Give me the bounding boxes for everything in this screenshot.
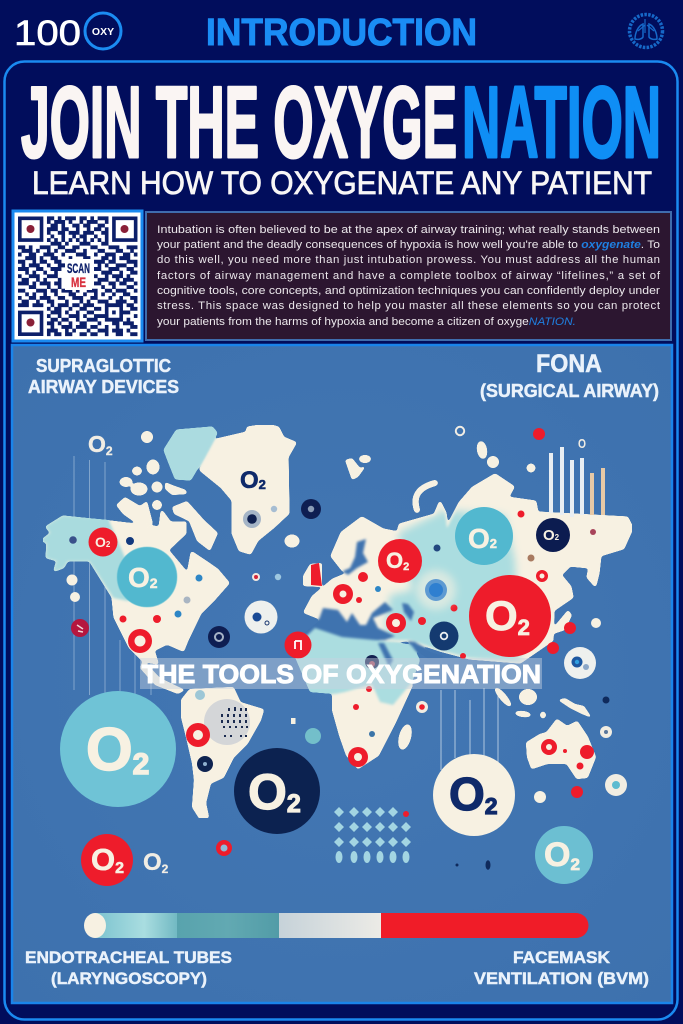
black sea — [402, 603, 414, 621]
south america grey disc — [204, 699, 250, 745]
O2 bubble: teal lower right: 2 — [570, 855, 580, 874]
bar chart: small bars on asia — [551, 436, 603, 517]
label: fona surgical airway: (SURGICAL AIRWAY) — [480, 381, 659, 401]
red marker with glyph — [284, 632, 312, 658]
O2 bubble: large navy: O — [248, 764, 287, 820]
O2 bubble: large cream: O — [449, 768, 485, 820]
O2 bubble: teal north america: O — [128, 562, 150, 593]
icon: lungs badge — [630, 14, 662, 48]
canadian arctic islands — [116, 431, 218, 551]
subtitle: LEARN HOW TO OXYGENATE ANY PATIENT — [32, 165, 652, 201]
gradient spectrum bar — [84, 913, 588, 938]
arctic teal island — [165, 428, 216, 479]
red markers — [120, 428, 594, 817]
map: small markers — [66, 427, 627, 870]
eurasia teal interior — [385, 510, 520, 662]
panel: introduction text: Intubation is often believed to be at the apex of airway training; what really stands between — [157, 224, 660, 236]
O2 bubble: large cream: 2 — [485, 793, 498, 819]
mediterranean sea — [295, 602, 395, 640]
O2 bubble: large red asia: 2 — [518, 615, 530, 640]
alaska teal overlay — [43, 517, 128, 600]
bar chart: small bars on asia: O — [578, 436, 586, 451]
north america — [43, 512, 228, 663]
map: land masses — [43, 425, 632, 818]
map title banner: THE TOOLS OF OXYGENATION — [142, 659, 541, 689]
QR modules — [18, 218, 137, 334]
O2 bubble: red europe: O — [386, 548, 403, 573]
O2 bubble: large navy — [234, 748, 320, 834]
greenland — [201, 425, 295, 553]
panel: QR code — [13, 211, 142, 341]
label: endotracheal tubes: ENDOTRACHEAL TUBES — [25, 948, 232, 967]
header: 100 OXY logo: OXY — [92, 26, 114, 38]
label: supraglottic airway devices: AIRWAY DEVICES — [28, 377, 179, 397]
O2 label: greenland: 2 — [259, 477, 266, 492]
africa — [333, 665, 412, 768]
O2 bubble: small navy asia — [536, 518, 570, 552]
O2 label: top left: O — [88, 431, 106, 457]
O2 bubble: red europe: 2 — [403, 561, 409, 573]
panel: introduction text: factors of airway management and have a complete toolbox of airway “lifelines,” a set of — [157, 270, 661, 282]
O2 bubble: teal north america: 2 — [150, 575, 158, 591]
south america data dots — [221, 707, 248, 737]
O2 bubble: teal asia — [455, 507, 513, 565]
O2 bubble: teal asia: 2 — [490, 536, 497, 551]
O2 bubble: large red asia — [469, 575, 551, 657]
panel: introduction text: stress. This space was designed to help you master all these elements so you can protect — [157, 300, 661, 312]
O2 label: top left: 2 — [106, 444, 113, 458]
south america — [182, 688, 263, 818]
panel: introduction text: do this well, you need more than just intubation prowess. You must address all the human — [157, 254, 660, 266]
O2 bubble: large cream — [433, 754, 515, 836]
panel: tools of oxygenation map — [12, 345, 672, 1003]
panel: introduction text: cognitive tools, core concepts, and optimization techniques you can confidently deploy under — [157, 285, 660, 297]
QR finder dots — [26, 225, 128, 326]
eurasia — [305, 475, 632, 662]
O2 bubble: red europe — [378, 539, 422, 583]
madagascar — [396, 723, 414, 751]
label: facemask ventilation: FACEMASK — [513, 948, 611, 967]
central america — [140, 660, 185, 694]
O2 bubble: large teal: 2 — [133, 748, 149, 781]
label: supraglottic airway devices: SUPRAGLOTTIC — [36, 356, 171, 376]
blue and grey dots — [174, 574, 381, 737]
label: facemask ventilation: VENTILATION (BVM) — [474, 969, 649, 988]
O2 bubble: teal north america — [117, 547, 177, 607]
label: fona surgical airway — [480, 350, 659, 401]
uk red flag shape — [311, 563, 322, 586]
svalbard and novaya zemlya — [345, 458, 366, 480]
O2 bubble: teal lower right: O — [544, 836, 570, 874]
red sea and persian gulf — [378, 643, 393, 667]
O2 bubble: small red north america: O2 — [95, 534, 111, 550]
O2 bubble: small navy asia: O2 — [543, 527, 560, 544]
maritime southeast asia — [493, 625, 592, 718]
red ring markers — [128, 570, 557, 856]
australia — [527, 720, 595, 778]
decorative lines west — [74, 456, 151, 700]
white markers — [66, 574, 601, 803]
scan me badge: ME — [71, 274, 86, 290]
label: fona surgical airway: FONA — [536, 350, 602, 378]
O2 bubble: red lower left — [81, 834, 133, 886]
O2 label: greenland: O — [240, 467, 259, 494]
label: endotracheal tubes — [25, 948, 232, 988]
panel: introduction text: your patients from the harms of hypoxia and become a citizen of oxyge NATION. — [157, 316, 576, 328]
O2 label: white lower left: O — [143, 849, 162, 876]
O2 label: white lower left: 2 — [162, 862, 169, 876]
iceland — [284, 534, 300, 548]
O2 bubble: large red asia: O — [485, 592, 518, 639]
label: supraglottic airway devices — [28, 356, 179, 397]
ring markers — [456, 427, 464, 435]
O2 bubble: red lower left: O — [91, 842, 115, 877]
diamond dot grid — [334, 807, 411, 863]
header: section title: INTRODUCTION — [206, 12, 477, 54]
O2 bubble: teal lower right — [535, 826, 593, 884]
panel: introduction text — [146, 212, 671, 340]
label: endotracheal tubes: (LARYNGOSCOPY) — [51, 969, 207, 988]
baltic sea — [343, 539, 368, 575]
decorative lines south — [441, 688, 498, 770]
uk — [303, 563, 322, 587]
header: 100 OXY logo — [14, 13, 121, 53]
panel: introduction text: your patient and the deadly consequences of hypoxia is how well you're able to oxygenate . To — [157, 239, 660, 251]
O2 bubble: large teal — [60, 691, 176, 807]
O2 bubble: large navy: 2 — [287, 790, 301, 818]
scan me badge — [65, 259, 92, 290]
O2 bubble: red lower left: 2 — [115, 860, 124, 877]
O2 bubble: small red north america — [88, 528, 118, 556]
japan and far east islands — [553, 610, 572, 634]
O2 bubble: large teal: O — [86, 716, 133, 783]
scan me badge: SCAN — [67, 260, 90, 276]
O2 bubble: teal asia: O — [468, 523, 490, 554]
header: 100 OXY logo: 100 — [14, 14, 81, 53]
label: facemask ventilation — [474, 948, 649, 988]
